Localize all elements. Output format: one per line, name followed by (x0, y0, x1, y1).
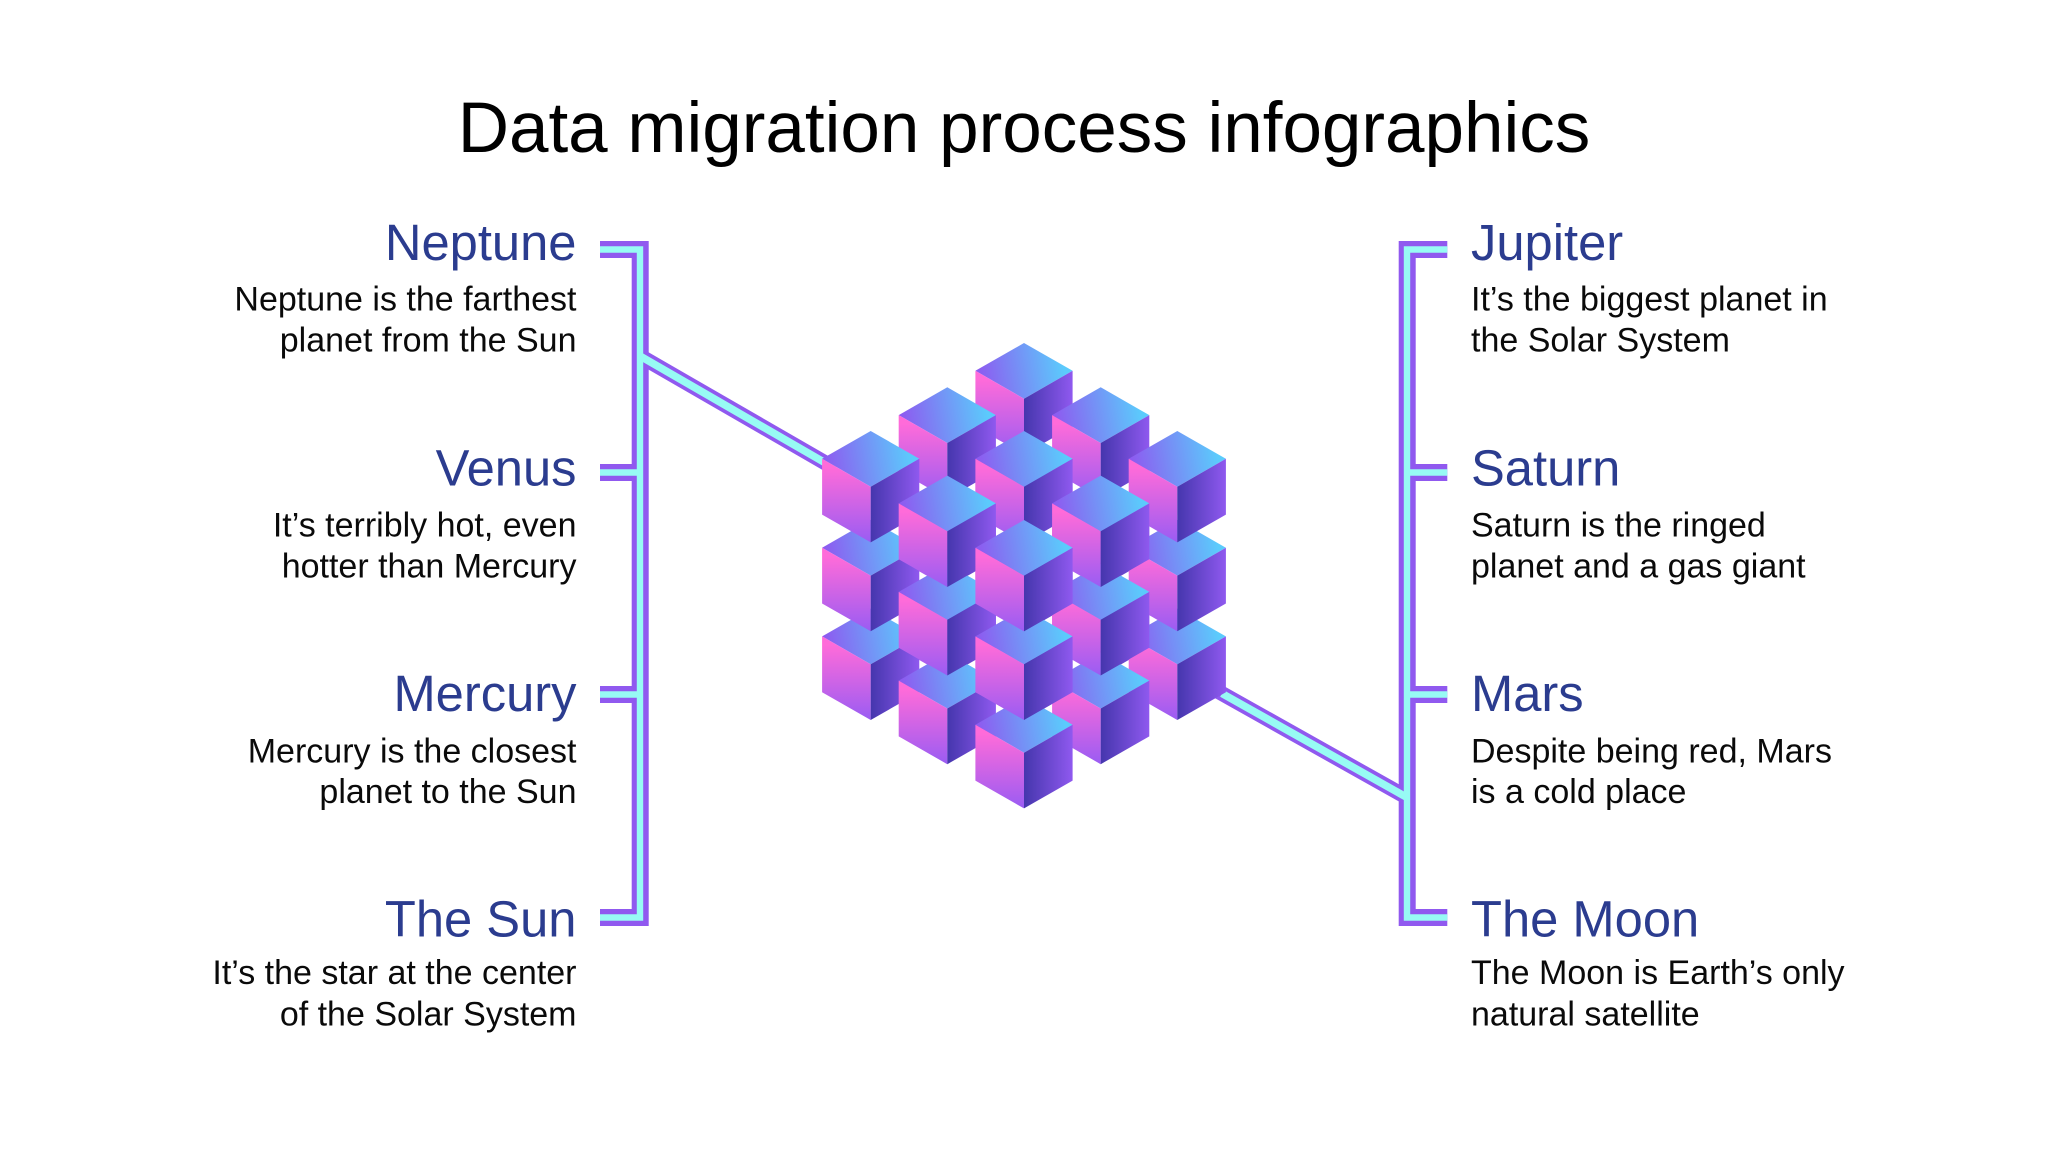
text block: The Moon (1471, 891, 1845, 1034)
text block: Saturn (1471, 440, 1806, 586)
title: Data migration process infographics (458, 89, 1590, 168)
text block: Mercury: Mercury (393, 665, 577, 722)
text block: Jupiter: It’s the biggest planet in (1471, 280, 1828, 318)
text block: Venus (273, 440, 576, 586)
text block: Mars (1471, 665, 1832, 811)
text block: Mars: is a cold place (1471, 773, 1686, 811)
text block: Mercury: Mercury is the closest (248, 732, 577, 770)
text block: Jupiter (1471, 214, 1828, 360)
isometric cube cluster (822, 343, 1226, 808)
text block: The Moon: natural satellite (1471, 996, 1700, 1034)
text block: The Sun: The Sun (385, 891, 576, 948)
text block: Neptune: planet from the Sun (280, 322, 576, 360)
text block: Neptune: Neptune is the farthest (234, 280, 577, 318)
text block: The Moon: The Moon (1471, 891, 1699, 948)
left bracket connector (600, 250, 835, 918)
text block: Mercury: planet to the Sun (319, 773, 576, 811)
text block: Venus: hotter than Mercury (282, 548, 576, 586)
text block: Venus: It’s terribly hot, even (273, 506, 576, 544)
text block: Saturn: Saturn is the ringed (1471, 506, 1766, 544)
text block: Mars: Despite being red, Mars (1471, 732, 1832, 770)
text block: Venus: Venus (436, 440, 576, 497)
text block: Neptune (234, 214, 577, 360)
text block: The Sun: of the Solar System (280, 996, 576, 1034)
text block: Mercury (248, 665, 577, 811)
text block: Mars: Mars (1471, 665, 1584, 722)
text block: The Sun: It’s the star at the center (212, 954, 576, 992)
right bracket connector (1205, 250, 1447, 918)
text block: Jupiter: the Solar System (1471, 322, 1730, 360)
text block: The Sun (212, 891, 576, 1034)
text block: Saturn: Saturn (1471, 440, 1620, 497)
text block: Saturn: planet and a gas giant (1471, 548, 1806, 586)
text block: The Moon: The Moon is Earth’s only (1471, 954, 1845, 992)
text block: Neptune: Neptune (385, 214, 576, 271)
text block: Jupiter: Jupiter (1471, 214, 1623, 271)
